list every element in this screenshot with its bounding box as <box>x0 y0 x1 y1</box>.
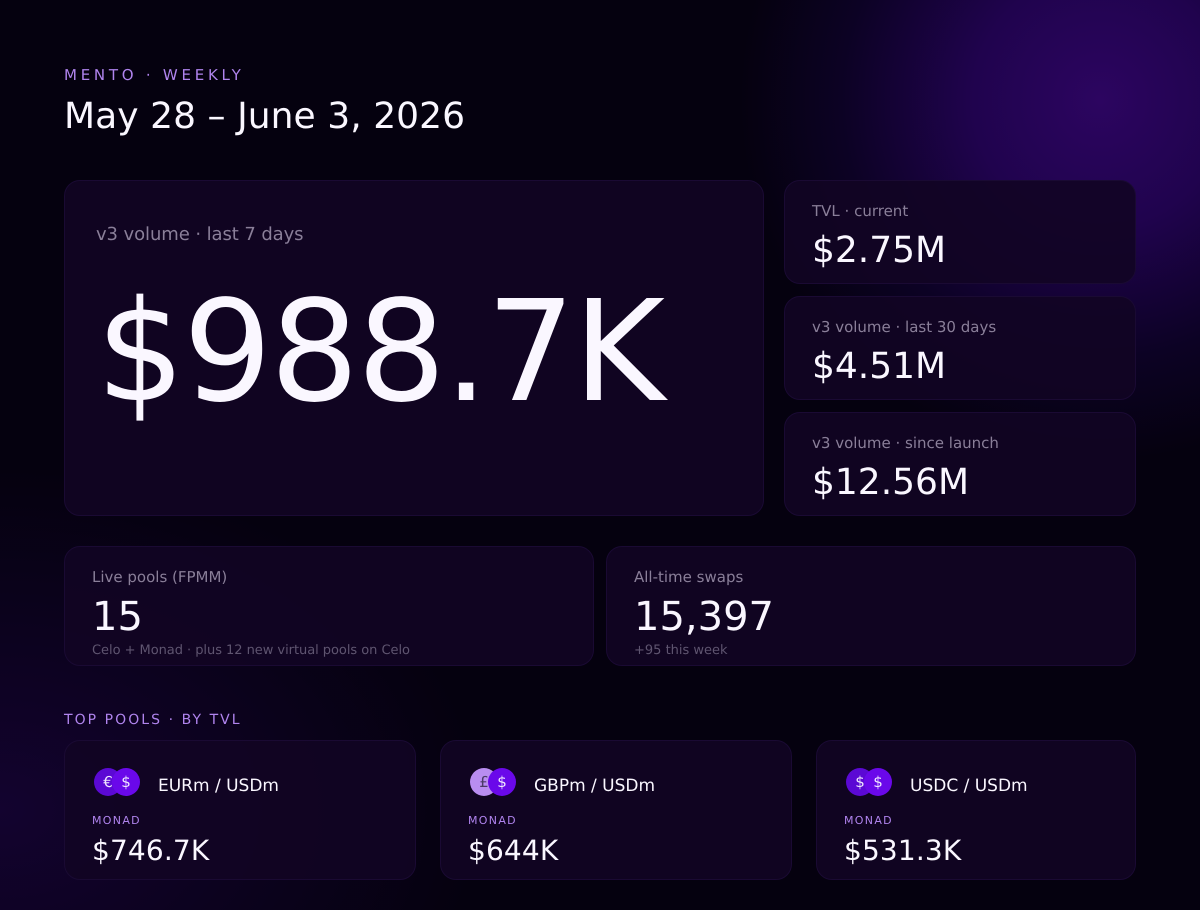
panel: v3 volume last 7 days <box>64 180 764 516</box>
label: live pools: Live pools (FPMM) <box>92 568 227 586</box>
chain: Monad: MONAD <box>468 814 517 827</box>
panel: live pools <box>64 546 594 666</box>
pool name: USDC / USDm: USDC / USDm <box>910 776 1028 796</box>
value: since launch: $12.56M <box>812 462 969 503</box>
icon: USDC and USD coins: $ <box>855 773 865 791</box>
heading: top pools by TVL: TOP POOLS · BY TVL <box>64 712 242 728</box>
chain: Monad: MONAD <box>92 814 141 827</box>
icon: GBP and USD coins: $ <box>497 773 507 791</box>
value: USDC pool TVL: $531.3K <box>844 834 961 867</box>
value: last 30 days: $4.51M <box>812 346 946 387</box>
icon: GBP and USD coins: £ <box>479 773 489 791</box>
icon: EUR and USD coins: € <box>103 773 113 791</box>
panel: TVL current <box>784 180 1136 284</box>
chain: Monad: MONAD <box>844 814 893 827</box>
pool name: EURm / USDm: EURm / USDm <box>158 776 279 796</box>
icon: USDC and USD coins <box>846 768 892 796</box>
label: v3 volume last 7 days: v3 volume · last 7 days <box>96 224 303 245</box>
value: EURm pool TVL: $746.7K <box>92 834 209 867</box>
eyebrow: Mento weekly: MENTO · WEEKLY <box>64 66 245 84</box>
icon: GBP and USD coins <box>470 768 516 796</box>
pool name: GBPm / USDm: GBPm / USDm <box>534 776 655 796</box>
panel: all-time swaps <box>606 546 1136 666</box>
value: all-time swaps: 15,397 <box>634 594 774 640</box>
note: live pools: Celo + Monad · plus 12 new virtual pools on Celo <box>92 643 410 658</box>
value: GBPm pool TVL: $644K <box>468 834 558 867</box>
note: swaps this week: +95 this week <box>634 643 728 658</box>
value: 988.7K: $988.7K <box>96 271 663 434</box>
panel: v3 volume last 30 days <box>784 296 1136 400</box>
value: live pools: 15 <box>92 594 143 640</box>
panel: EURm / USDm pool <box>64 740 416 880</box>
panel: v3 volume since launch <box>784 412 1136 516</box>
label: since launch: v3 volume · since launch <box>812 434 999 452</box>
icon: EUR and USD coins: $ <box>121 773 131 791</box>
panel: GBPm / USDm pool <box>440 740 792 880</box>
label: last 30 days: v3 volume · last 30 days <box>812 318 996 336</box>
label: TVL: TVL · current <box>812 202 908 220</box>
label: all-time swaps: All-time swaps <box>634 568 743 586</box>
value: TVL: $2.75M <box>812 230 946 271</box>
panel: USDC / USDm pool <box>816 740 1136 880</box>
icon: EUR and USD coins <box>94 768 140 796</box>
icon: USDC and USD coins: $ <box>873 773 883 791</box>
title: date range: May 28 – June 3, 2026 <box>64 96 465 137</box>
